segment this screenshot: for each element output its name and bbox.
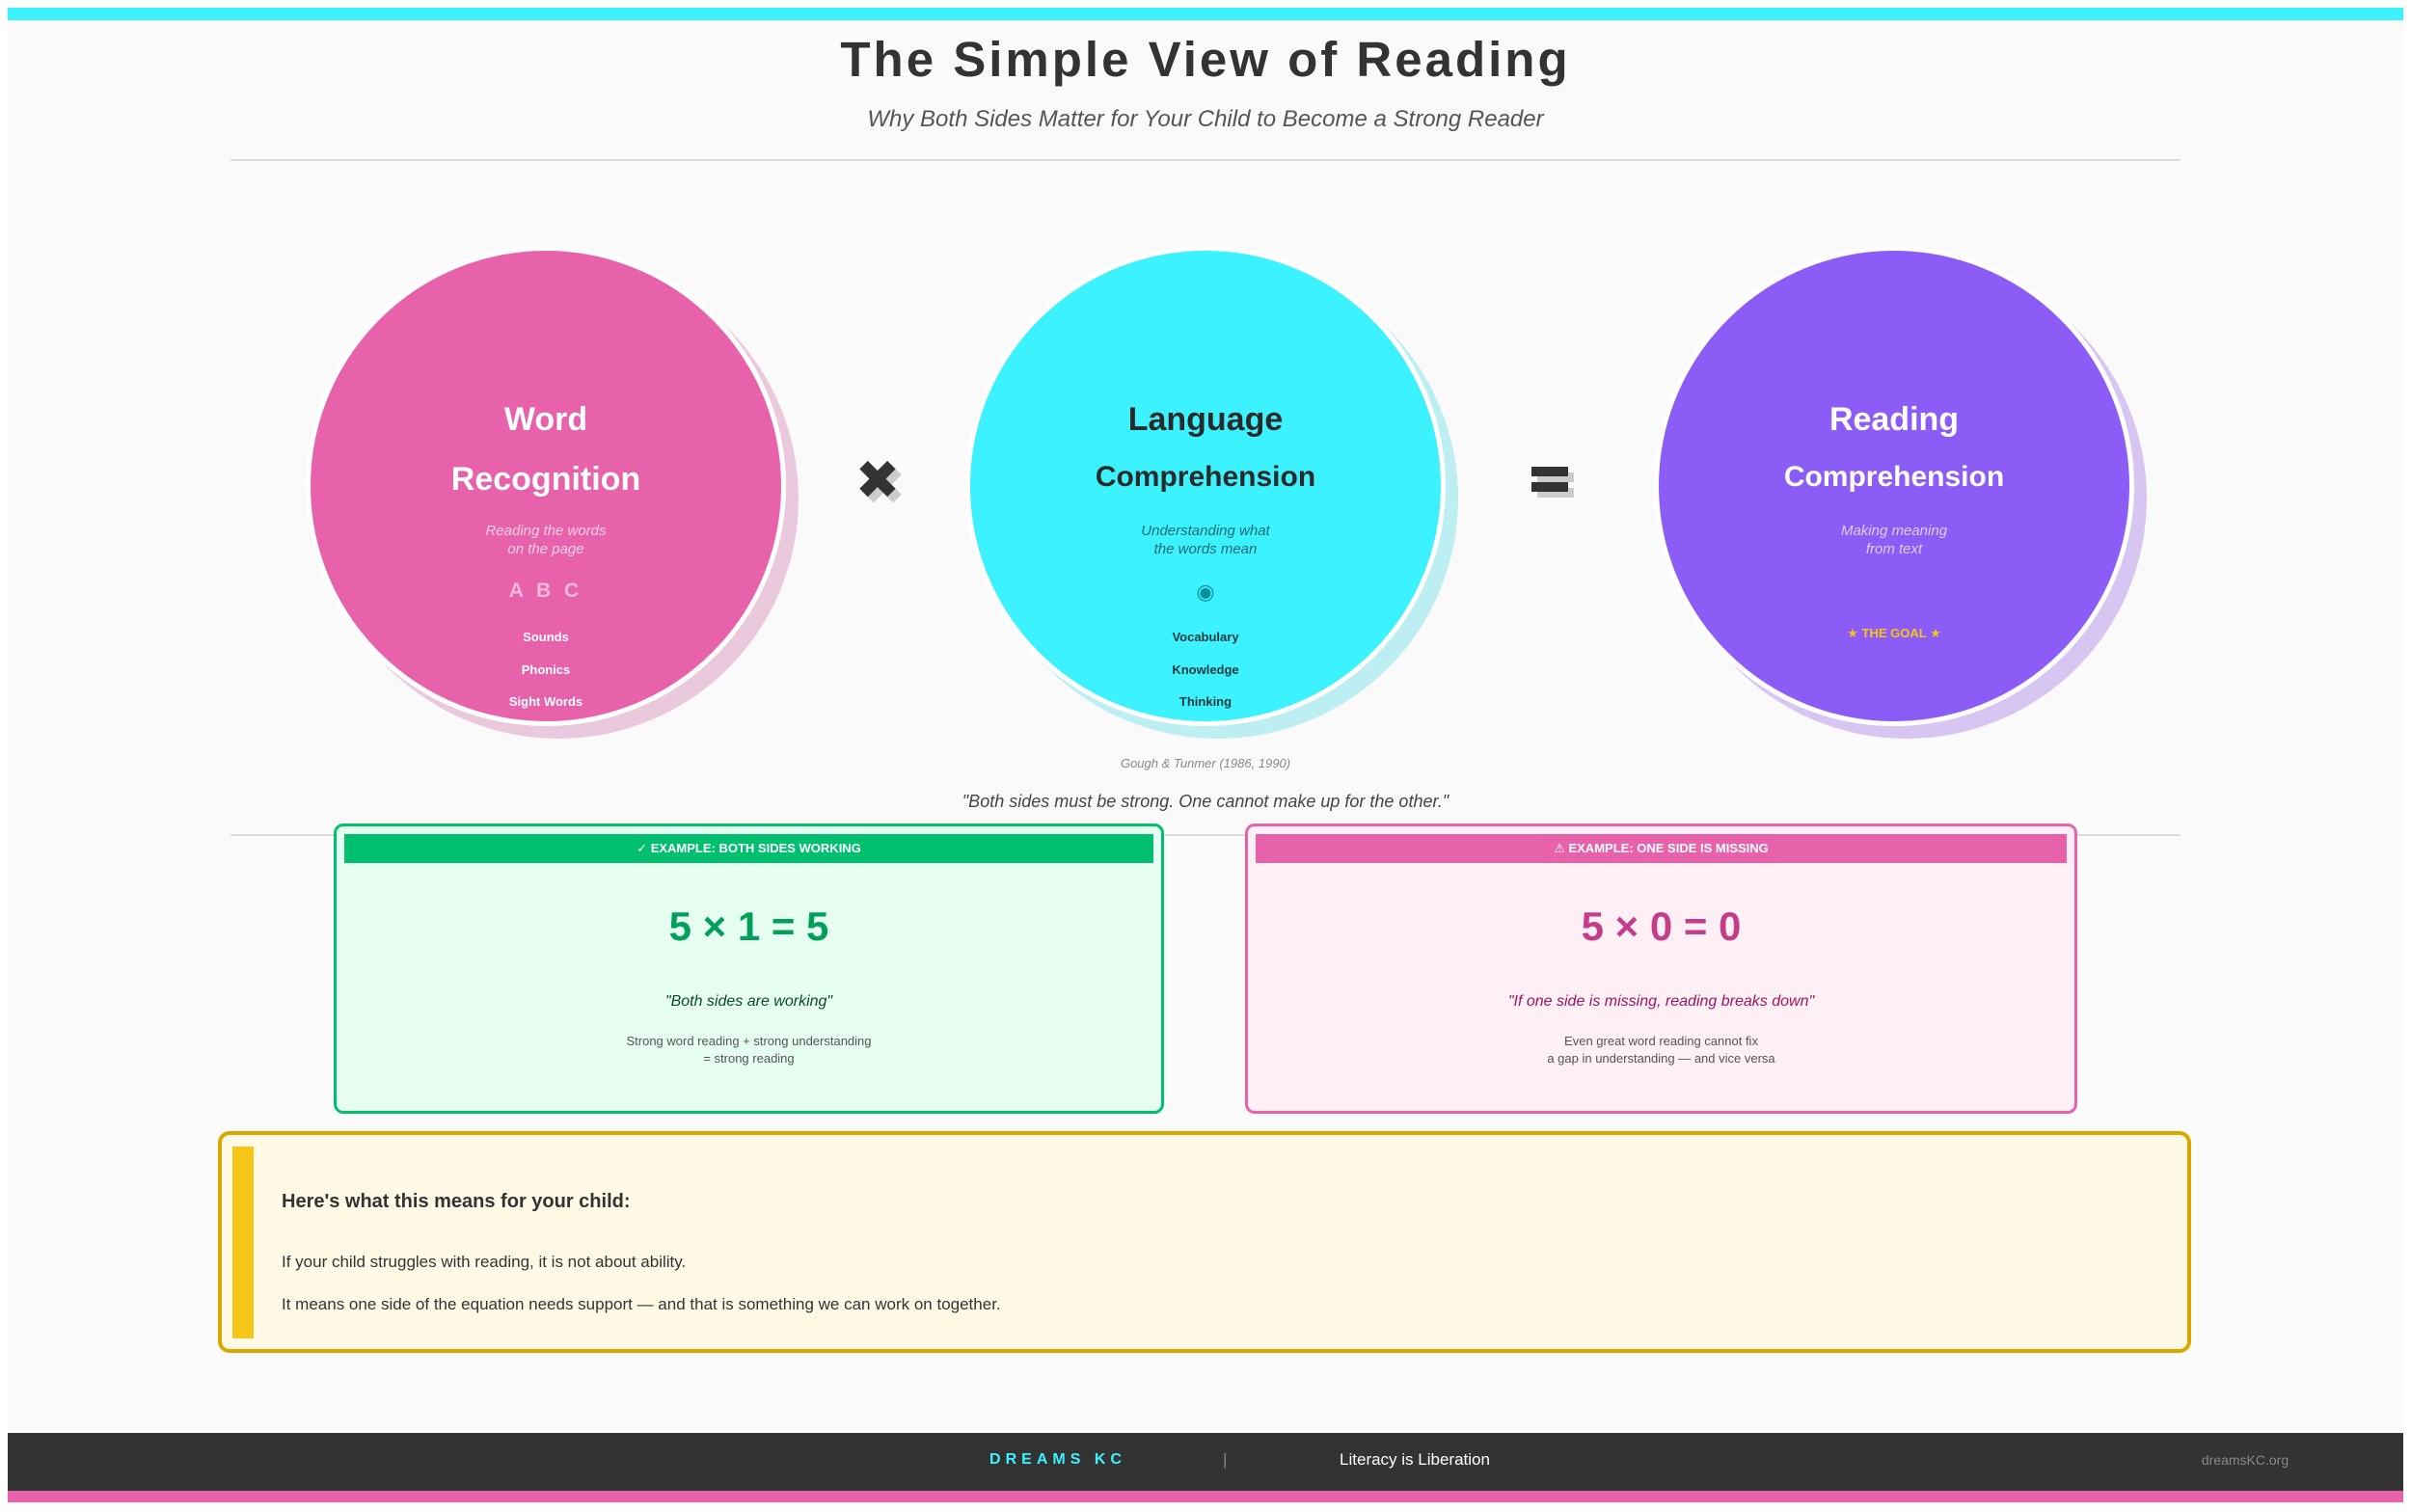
circle: language comprehension: Comprehension [1096,461,1315,493]
circle: language comprehension: Thinking [1179,694,1232,709]
circle: reading comprehension: Reading [1829,401,1959,438]
footer: dreamsKC.org [2202,1452,2289,1468]
circle: language comprehension [970,251,1458,739]
title: The Simple View of Reading [840,32,1571,87]
circle: language comprehension: Language [1128,401,1283,438]
circle: word recognition: Sounds [523,630,569,644]
footer [8,1433,2403,1502]
callout: what this means: Here's what this means for your child: [282,1191,631,1212]
panel: both sides working: "Both sides are working" [665,993,832,1010]
panel: both sides working: ✓ EXAMPLE: BOTH SIDES WORKING [637,841,861,855]
circle: language comprehension: Knowledge [1172,662,1239,677]
circle: word recognition: Sight Words [509,694,582,709]
circle: reading comprehension: Making meaning [1841,523,1947,539]
panel: one side missing: "If one side is missing, reading breaks down" [1508,993,1814,1010]
icon: target: ◉ [1196,580,1215,604]
circle: language comprehension: Understanding what [1141,523,1270,539]
circle: word recognition: Reading the words [485,523,607,539]
panel: both sides working: Strong word reading + strong understanding [626,1034,872,1048]
circle: language comprehension: the words mean [1154,541,1257,557]
quote: "Both sides must be strong. One cannot make up for the other." [962,792,1449,811]
panel: one side missing: ⚠ EXAMPLE: ONE SIDE IS MISSING [1554,841,1769,855]
circle: word recognition [311,251,799,739]
icon: ABC: A B C [509,580,582,602]
goal label: ★ THE GOAL ★ [1847,626,1941,640]
panel: one side missing: 5 × 0 = 0 [1582,904,1741,949]
circle: reading comprehension: from text [1866,541,1922,557]
subtitle: Why Both Sides Matter for Your Child to Become a Strong Reader [867,106,1544,132]
circle: word recognition: Recognition [451,461,640,498]
callout: what this means [218,1131,2191,1353]
panel: both sides working [334,824,1164,1114]
circle: word recognition: on the page [507,541,584,557]
footer: | [1223,1450,1227,1469]
footer: DREAMS KC [989,1451,1126,1468]
panel: one side missing: a gap in understanding — and vice versa [1547,1051,1775,1066]
citation: Gough & Tunmer (1986, 1990) [1121,756,1290,770]
panel: both sides working: = strong reading [703,1051,795,1066]
callout: what this means: It means one side of the equation needs support — and that is something we can work on together. [282,1295,1001,1313]
circle: word recognition: Word [504,401,587,438]
circle: reading comprehension [1659,251,2147,739]
panel: both sides working: 5 × 1 = 5 [669,904,828,949]
callout: what this means: If your child struggles with reading, it is not about ability. [282,1253,686,1271]
operator: equals [1531,467,1574,498]
operator: times: ✖ [855,449,900,510]
top cyan bar [8,8,2403,20]
circle: word recognition: Phonics [522,662,570,677]
circle: reading comprehension: Comprehension [1784,461,2004,493]
panel: one side missing [1245,824,2077,1114]
circle: language comprehension: Vocabulary [1172,630,1239,644]
panel: one side missing: Even great word reading cannot fix [1564,1034,1758,1048]
footer: Literacy is Liberation [1340,1450,1490,1469]
